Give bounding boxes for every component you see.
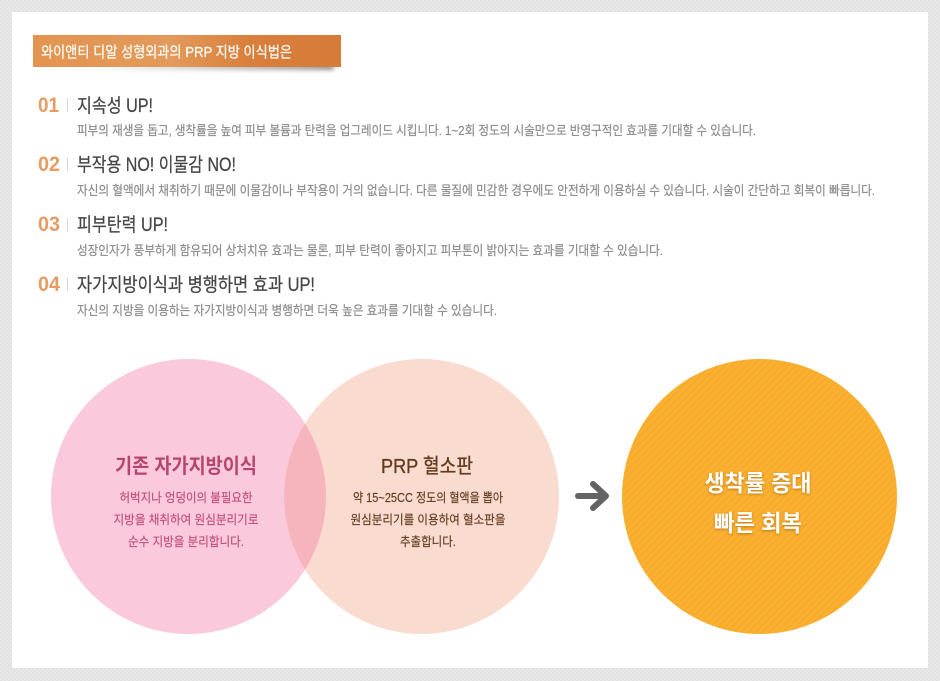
- circle: PRP platelets: 약 15~25CC 정도의 혈액을 뽑아: [353, 490, 503, 505]
- item 04: [38, 273, 497, 318]
- item 01: 지속성 UP!: [77, 95, 153, 117]
- circle: result: 빠른 회복: [714, 510, 802, 536]
- item 01: [38, 94, 756, 138]
- circle: existing fat graft: [51, 359, 326, 634]
- item 04: 04: [38, 273, 60, 296]
- item 04: 자가지방이식과 병행하면 효과 UP!: [77, 274, 315, 296]
- section heading banner: [33, 35, 341, 70]
- circle: existing fat graft: 지방을 채취하여 원심분리기로: [114, 513, 258, 527]
- item 04: 자신의 지방을 이용하는 자가지방이식과 병행하면 더욱 높은 효과를 기대할 수 있습니다.: [77, 303, 497, 318]
- item 02: 02: [38, 153, 60, 176]
- circle: PRP platelets: [284, 359, 559, 634]
- item 03: [38, 213, 663, 258]
- circle: PRP platelets: 추출합니다.: [400, 535, 456, 549]
- item 03: 03: [38, 213, 60, 236]
- section heading banner: 와이앤티 디알 성형외과의 PRP 지방 이식법은: [41, 44, 292, 61]
- item 01: 01: [38, 94, 59, 117]
- item 02: [38, 153, 875, 198]
- item 01: 피부의 재생을 돕고, 생착률을 높여 피부 볼륨과 탄력을 업그레이드 시킵니다. 1~2회 정도의 시술만으로 반영구적인 효과를 기대할 수 있습니다.: [77, 123, 756, 138]
- circle: PRP platelets: PRP 혈소판: [381, 455, 473, 478]
- arrow: [578, 484, 606, 508]
- circle: existing fat graft: 순수 지방을 분리합니다.: [128, 535, 244, 549]
- circle: result: 생착률 증대: [704, 470, 812, 496]
- item 02: 부작용 NO! 이물감 NO!: [77, 154, 236, 176]
- circle: PRP platelets: 원심분리기를 이용하여 혈소판을: [350, 513, 506, 527]
- circle: existing fat graft: 기존 자가지방이식: [115, 455, 257, 478]
- circle: result: [622, 359, 897, 634]
- item 03: 성장인자가 풍부하게 함유되어 상처치유 효과는 물론, 피부 탄력이 좋아지고 피부톤이 밝아지는 효과를 기대할 수 있습니다.: [77, 243, 663, 258]
- item 03: 피부탄력 UP!: [77, 214, 168, 236]
- circle: existing fat graft: 허벅지나 엉덩이의 불필요한: [120, 491, 253, 505]
